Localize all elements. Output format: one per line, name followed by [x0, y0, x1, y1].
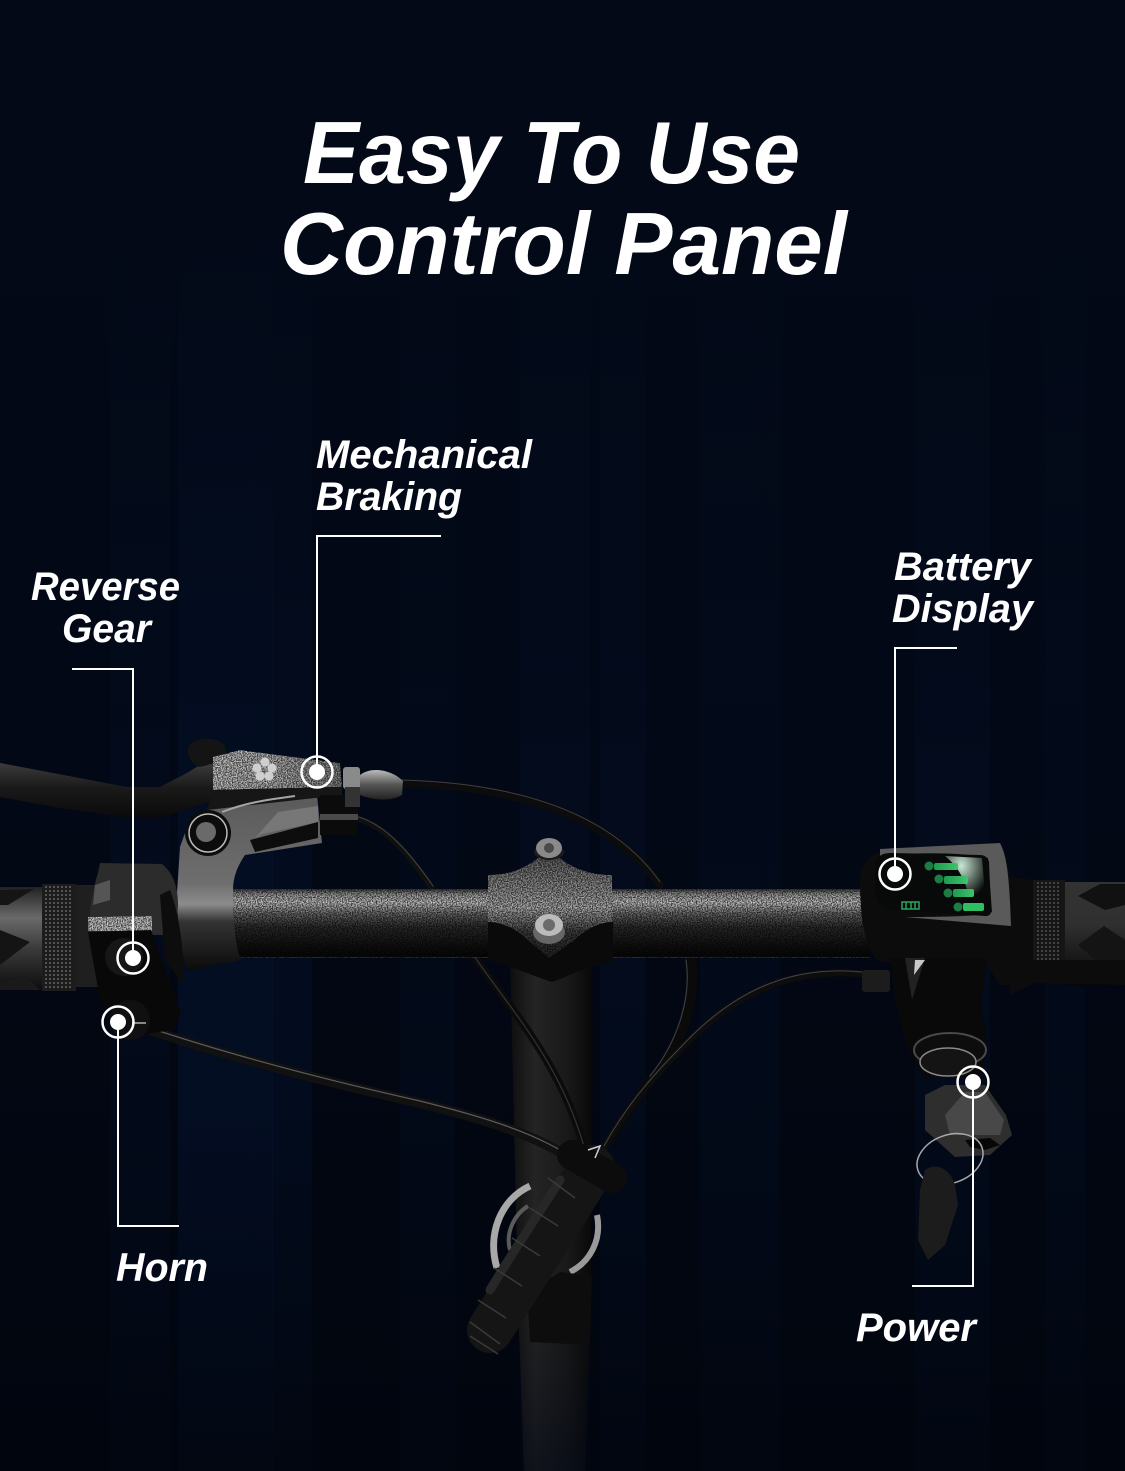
title: Control Panel [280, 194, 849, 293]
steering stem [510, 950, 592, 1471]
right throttle and display unit [860, 843, 1034, 985]
cables under the handlebar [150, 950, 862, 1165]
icon: lower clamp bolt [533, 914, 565, 944]
callout: reverse gear: Reverse [31, 565, 180, 609]
callout: battery display: Display [892, 587, 1035, 631]
title [280, 103, 849, 293]
handlebar tube [230, 889, 870, 958]
lower bracket [527, 1272, 592, 1345]
callout: power: Power [856, 1306, 978, 1350]
brake lever blade [0, 739, 226, 818]
icon: pivot bolt [185, 810, 231, 856]
left grip [0, 884, 98, 991]
callout: reverse gear: Gear [62, 607, 153, 651]
callout: battery display [880, 545, 1035, 890]
callout: mechanical braking: Mechanical [316, 433, 533, 477]
key [910, 1085, 1012, 1260]
callout: power [856, 1066, 988, 1350]
brake body and clamp [177, 750, 342, 971]
icon: top clamp bolt [534, 838, 564, 860]
title: Easy To Use [303, 103, 800, 202]
callout: horn [102, 1006, 208, 1290]
knurled ring [42, 884, 76, 991]
cable sleeve [470, 1146, 612, 1354]
knurled ring [1033, 880, 1065, 964]
icon: flower logo [252, 757, 277, 781]
callout: mechanical braking: Braking [316, 475, 462, 519]
right grip [1010, 880, 1125, 995]
folding disc behind cable sleeve [494, 1186, 598, 1272]
icon: battery glyph [902, 902, 919, 909]
callout: horn: Horn [116, 1246, 208, 1290]
brake cable adjuster [320, 767, 403, 835]
left switch housing [88, 863, 183, 1040]
upper brake cables [355, 780, 660, 888]
central stem clamp [488, 838, 613, 982]
ignition lock [862, 958, 986, 1077]
callout: mechanical braking [302, 433, 533, 788]
callout: reverse gear [31, 565, 180, 974]
callout: battery display: Battery [894, 545, 1033, 589]
battery display screen [875, 853, 991, 916]
